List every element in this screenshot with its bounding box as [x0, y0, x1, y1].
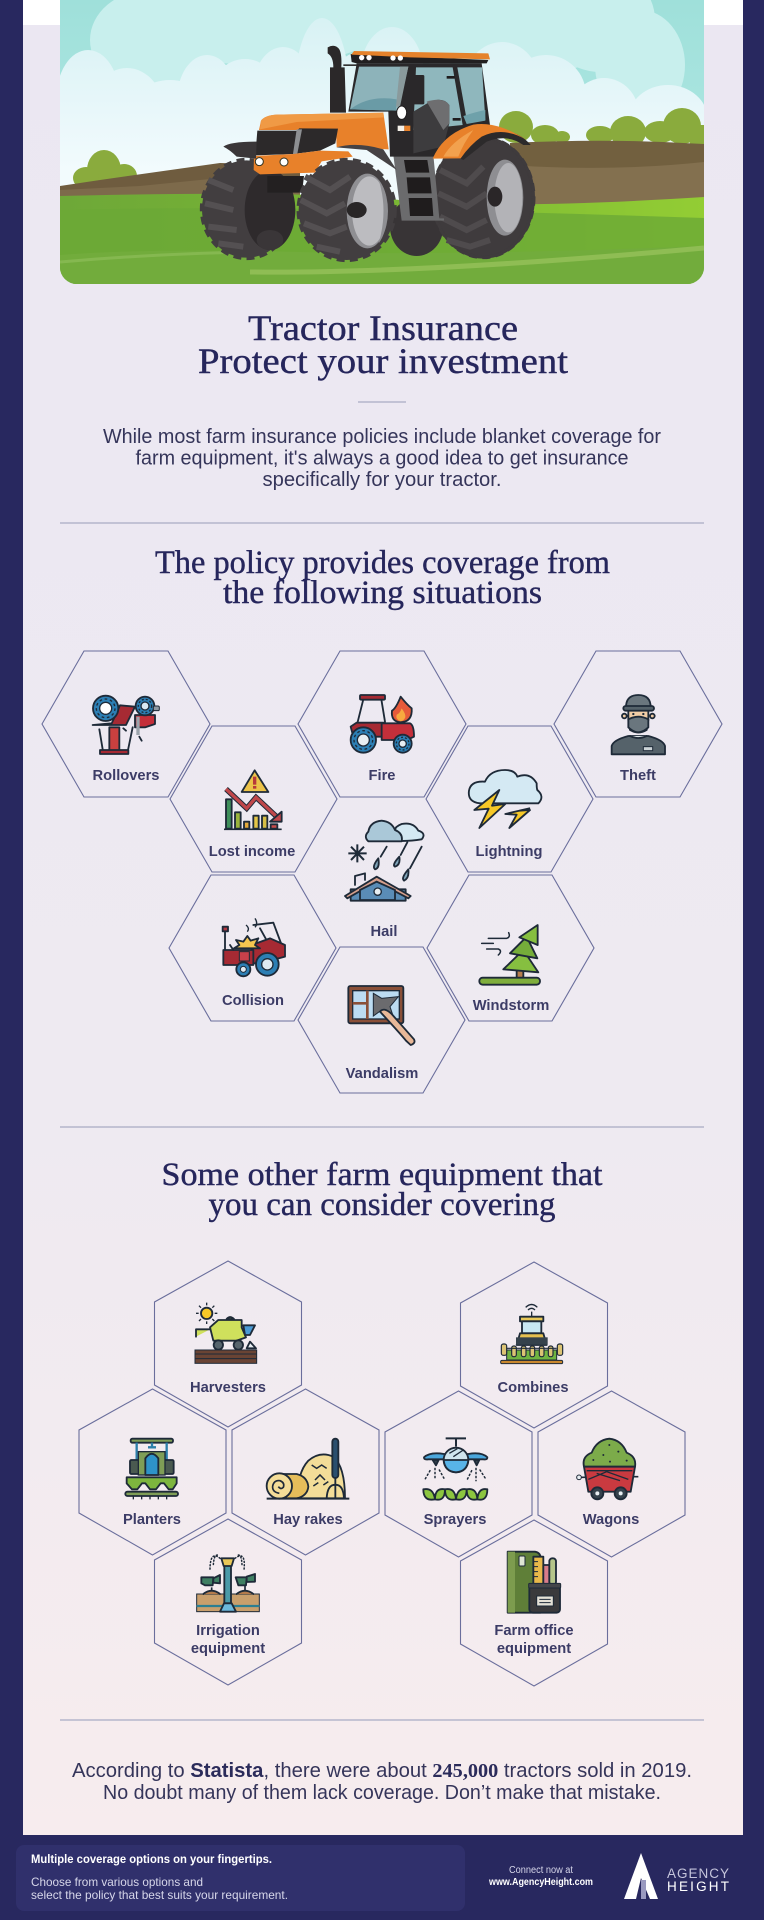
label: Harvesters	[190, 1380, 266, 1396]
hero illustration: tractor in field	[56, 0, 708, 284]
icon: irrigation sprinkler	[197, 1555, 259, 1612]
hex: Irrigation equipment	[154, 1519, 302, 1685]
hex: Theft	[554, 651, 722, 797]
icon: broken window with bat	[348, 986, 415, 1045]
hex: Rollovers	[42, 651, 210, 797]
label: Wagons	[583, 1512, 639, 1528]
label: Lost income	[209, 844, 295, 860]
label: Combines	[498, 1380, 568, 1396]
icon: hay bales and rake	[267, 1439, 349, 1499]
front wheel	[298, 159, 395, 261]
icon: storm cloud	[469, 770, 541, 828]
hex: Collision	[169, 875, 336, 1021]
label: Collision	[222, 993, 284, 1009]
roof	[351, 51, 490, 63]
bushes	[73, 108, 704, 190]
footer: Agency Height logo	[624, 1853, 729, 1899]
footer: website call to action: Connect now at	[509, 1865, 573, 1876]
icon: thief	[612, 695, 665, 754]
label line 2: equipment	[191, 1641, 265, 1657]
icon: planter	[125, 1439, 178, 1499]
label: Lightning	[476, 844, 542, 860]
brown hills	[60, 141, 704, 204]
hex: Lost income	[170, 726, 337, 872]
label: Theft	[620, 768, 656, 784]
closing statement: No doubt many of them lack coverage. Don’t make that mistake.	[103, 1782, 661, 1804]
hex: Wagons	[538, 1391, 685, 1557]
footer panel: coverage options: Multiple coverage options on your fingertips.	[31, 1854, 272, 1866]
panel: situations hexagon grid	[42, 651, 722, 1093]
heading: other equipment: you can consider covering	[208, 1187, 556, 1223]
hex: Planters	[79, 1389, 226, 1555]
icon: tractor collision	[223, 918, 285, 976]
label: Rollovers	[93, 768, 159, 784]
heading: coverage situations: the following situations	[223, 575, 542, 611]
closing statement	[72, 1760, 692, 1804]
cab	[343, 63, 490, 157]
front wheel back	[201, 159, 295, 259]
heading: other equipment: Some other farm equipment that	[162, 1157, 602, 1193]
title: Protect your investment	[198, 341, 568, 381]
label: Hail	[371, 924, 397, 940]
closing statement: According to Statista, there were about 245,000 tractors sold in 2019.	[72, 1760, 692, 1782]
footer: website call to action	[488, 1865, 593, 1888]
rear fender	[433, 124, 531, 160]
heading: coverage situations	[155, 545, 610, 611]
grass	[60, 194, 704, 284]
icon: wind-blown tree	[479, 925, 540, 985]
footer panel: coverage options: select the policy that best suits your requirement.	[31, 1888, 288, 1902]
footer: Agency Height logo: HEIGHT	[667, 1879, 729, 1894]
icon: loaded wagon	[577, 1439, 638, 1499]
hex: Combines	[460, 1262, 608, 1428]
intro text: While most farm insurance policies include blanket coverage for	[103, 426, 661, 448]
intro text	[103, 426, 661, 491]
icon: falling chart	[224, 770, 282, 829]
label: Irrigation	[196, 1623, 260, 1639]
hex: Farm office equipment	[460, 1520, 608, 1686]
panel: equipment hexagon clusters	[79, 1261, 685, 1686]
ladder	[393, 155, 444, 221]
label: Hay rakes	[273, 1512, 343, 1528]
intro text: farm equipment, it's always a good idea to get insurance	[136, 448, 628, 470]
label line 2: equipment	[497, 1641, 571, 1657]
footer panel: coverage options: Choose from various options and	[31, 1875, 203, 1889]
label: Fire	[369, 768, 395, 784]
label: Planters	[123, 1512, 181, 1528]
icon: burning tractor	[351, 695, 414, 753]
icon: binder and stationery	[508, 1552, 561, 1613]
intro text: specifically for your tractor.	[262, 469, 502, 491]
far rear wheel	[390, 138, 534, 258]
heading: other equipment	[162, 1157, 602, 1223]
icon: drone sprayer	[423, 1438, 487, 1500]
exhaust	[328, 46, 346, 113]
hex: Windstorm	[427, 875, 594, 1021]
heading: coverage situations: The policy provides coverage from	[155, 545, 610, 581]
hex: Fire	[298, 651, 466, 797]
label: Sprayers	[424, 1512, 486, 1528]
label: Windstorm	[473, 998, 549, 1014]
hex: Lightning	[426, 726, 593, 872]
footer: Agency Height logo: AGENCY	[667, 1866, 729, 1881]
icon: rollover	[93, 696, 159, 754]
footer panel: coverage options	[16, 1845, 465, 1911]
tractor	[201, 46, 534, 261]
hex: Hay rakes	[232, 1389, 379, 1555]
footer: website call to action: www.AgencyHeight.com	[488, 1877, 593, 1888]
top white band	[23, 0, 743, 25]
hex: Sprayers	[385, 1391, 532, 1557]
title	[198, 308, 568, 381]
hood	[223, 113, 397, 193]
icon: autonomous combine	[501, 1304, 563, 1364]
label: Vandalism	[346, 1066, 418, 1082]
hex: Harvesters	[154, 1261, 302, 1427]
icon: harvester	[195, 1303, 257, 1363]
hex: Hail	[345, 821, 424, 940]
icon: hail on house	[345, 821, 424, 901]
title: Tractor Insurance	[248, 308, 518, 348]
hex: Vandalism	[298, 947, 465, 1093]
label: Farm office	[494, 1623, 574, 1639]
